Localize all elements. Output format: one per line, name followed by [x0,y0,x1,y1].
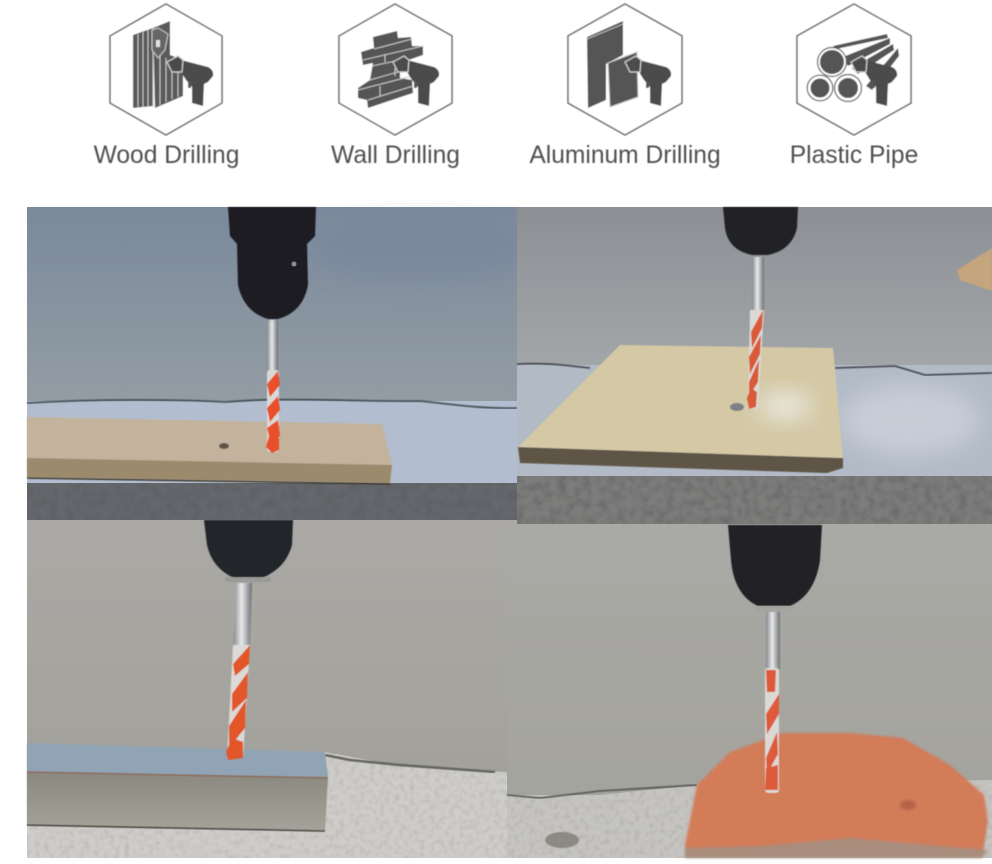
label: wood drilling: Wood Drilling [94,142,239,169]
photo: drilling a fibre board [517,207,992,524]
fibre board [518,345,843,473]
brick [685,733,988,858]
drill chuck [723,207,798,255]
chuck screw [292,262,296,266]
icon: wood drilling [110,4,222,135]
icon: aluminum drilling [568,4,682,135]
label: aluminum drilling: Aluminum Drilling [529,142,721,169]
drill bit [225,577,271,760]
metal bar [27,743,328,831]
icon: wall drilling [339,4,452,135]
icon: plastic pipe [797,4,911,135]
label: wall drilling: Wall Drilling [331,142,460,169]
drill chuck [228,207,316,319]
drill bit [755,606,793,793]
wood plank [27,417,392,484]
drill bit [747,257,764,409]
photo: drilling a metal bar [27,520,517,858]
oil stain [545,832,579,848]
label: plastic pipe: Plastic Pipe [790,142,918,169]
drill bit [266,320,280,453]
photo: drilling a brick [507,524,992,858]
photo: drilling a wood plank [27,207,530,520]
drill chuck [728,525,822,606]
wood block at the edge [957,248,992,291]
drill chuck [204,520,293,578]
